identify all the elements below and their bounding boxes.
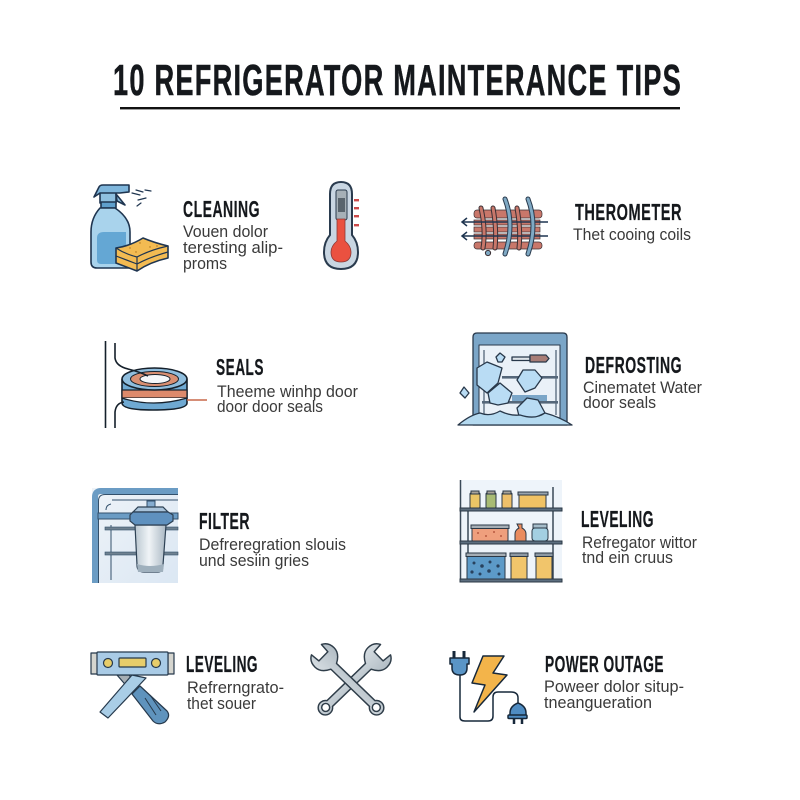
text block: thet souer (187, 695, 256, 713)
text block: teresting alip- (183, 239, 283, 257)
text block: tnd ein cruus (582, 549, 673, 567)
icon: water filter (92, 488, 178, 583)
heading: LEVELING (186, 651, 258, 677)
tip: power outage (450, 651, 684, 724)
icon: spirit level and screwdriver (91, 652, 174, 724)
heading: LEVELING (581, 506, 654, 532)
text block: Thet cooing coils (573, 226, 691, 244)
text block: Vouen dolor (183, 223, 268, 241)
text block (217, 383, 358, 416)
text block: Poweer dolor situp- (544, 678, 684, 696)
icon: frosted freezer (458, 333, 572, 425)
text block (199, 536, 346, 570)
heading: SEALS (216, 354, 264, 380)
text block: und sesiin gries (199, 552, 309, 570)
text block: Refrerngrato- (187, 679, 284, 697)
heading: CLEANING (183, 196, 260, 222)
heading: POWER OUTAGE (545, 651, 664, 677)
text block: Refregator wittor (582, 534, 697, 552)
tip: cleaning (91, 185, 283, 273)
text block (183, 223, 283, 273)
icon: fridge shelves (460, 480, 562, 582)
text block (582, 534, 697, 567)
icon: crossed wrenches (307, 640, 395, 723)
heading: FILTER (199, 508, 250, 534)
icon: spray bottle and sponge (91, 185, 168, 271)
tip: seals (106, 341, 358, 428)
text block: Defreregration slouis (199, 536, 346, 554)
tip: filter (92, 488, 346, 583)
text block (544, 678, 684, 712)
icon: plug and lightning bolt (450, 651, 527, 724)
tip: leveling (shelves) (460, 480, 697, 582)
heading: THEROMETER (575, 199, 682, 225)
heading: DEFROSTING (585, 352, 682, 378)
text block: door seals (583, 394, 656, 412)
text block: proms (183, 255, 227, 273)
icon: thermometer (324, 182, 359, 269)
icon: cooling coils (462, 199, 548, 256)
icon: door seal (106, 341, 207, 428)
text block (187, 679, 284, 713)
tip: cooling coils (462, 199, 691, 256)
text block: Cinematet Water (583, 379, 702, 397)
tip: defrosting (458, 333, 702, 425)
text block (583, 379, 702, 412)
text block: door door seals (217, 398, 323, 416)
tip: leveling (tools) (91, 651, 284, 724)
text block: Theeme winhp door (217, 383, 358, 401)
text block: tneangueration (544, 694, 652, 712)
